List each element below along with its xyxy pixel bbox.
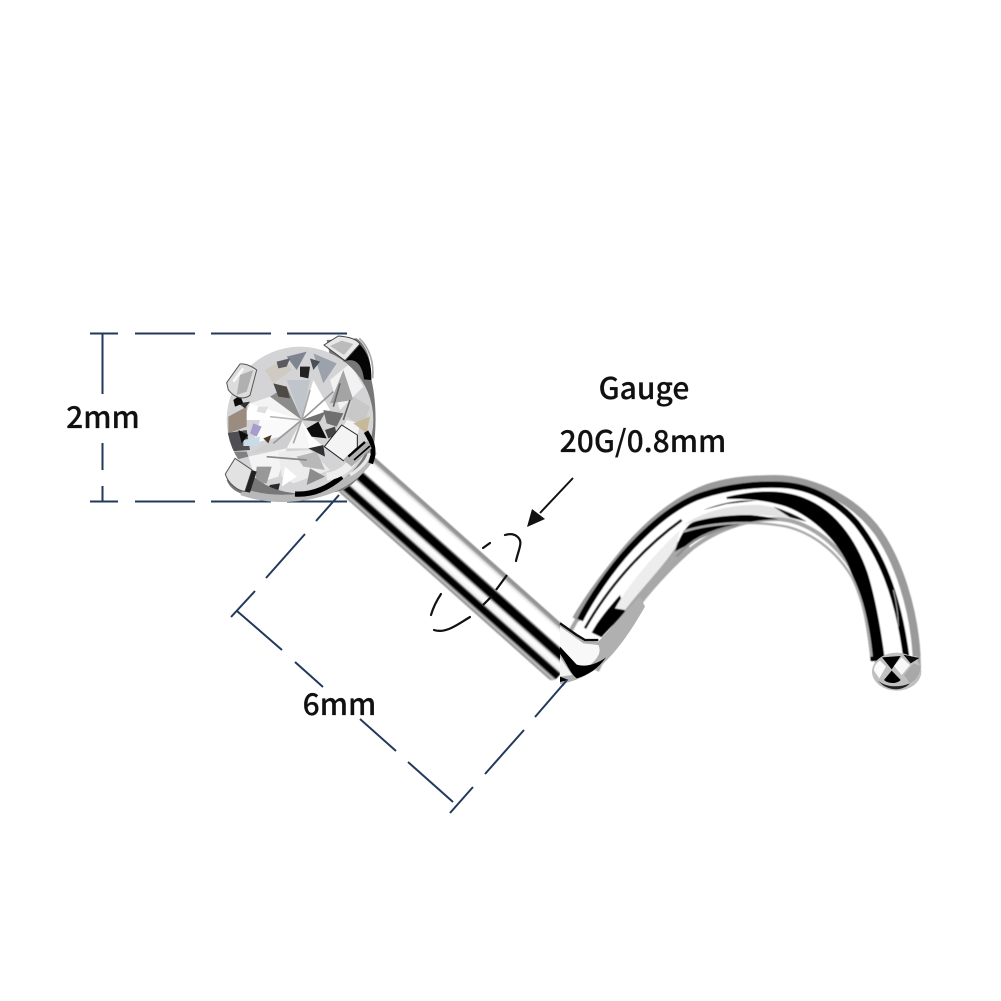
prong: bottom left bbox=[225, 458, 257, 493]
dimension: 6mm length lines bbox=[231, 495, 567, 813]
curved pin tube bbox=[576, 479, 917, 668]
bend highlight bbox=[560, 597, 645, 684]
label: Gauge: Gauge bbox=[599, 364, 689, 408]
tube reflections, mapped to zoom coordinates bbox=[576, 479, 917, 660]
straight pin shaft bbox=[336, 452, 645, 686]
prong: top right bbox=[324, 336, 373, 380]
arrow: gauge pointer bbox=[527, 478, 573, 527]
label: 2mm: 2mm bbox=[66, 393, 140, 437]
label: 6mm: 6mm bbox=[303, 680, 376, 724]
pin tip ball bbox=[872, 653, 921, 691]
diamond facets bbox=[223, 343, 377, 497]
prong: front right bbox=[324, 425, 372, 467]
prong: left bbox=[227, 364, 257, 398]
label: 20G/0.8mm: 20G/0.8mm bbox=[560, 417, 726, 461]
dimension: 2mm height lines bbox=[90, 334, 347, 502]
gemstone with prongs bbox=[223, 336, 377, 498]
setting: lower cup rim bbox=[242, 432, 373, 498]
icon: gauge ring arcs bbox=[431, 534, 520, 631]
setting back rim bbox=[227, 338, 376, 497]
gauge cut line bbox=[483, 575, 507, 605]
